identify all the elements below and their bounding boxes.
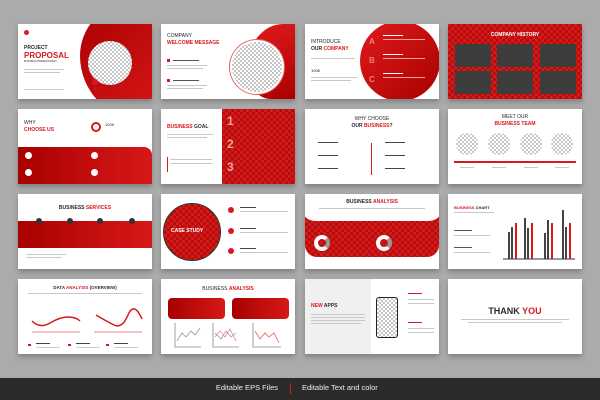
- title: PROPOSAL: [24, 51, 69, 60]
- heading: OUR COMPANY: [311, 46, 349, 52]
- red checker panel: 1: [227, 114, 234, 128]
- slide: business analysis donuts: [305, 194, 439, 269]
- slide: introduce our company: B: [369, 56, 375, 65]
- slide: new apps: [305, 279, 439, 354]
- slide: why choose our business: [305, 109, 439, 184]
- photo placeholder circle: [88, 41, 132, 85]
- slide: why choose us: [18, 109, 152, 184]
- letters: A: [369, 37, 375, 46]
- slide: thank you: THANK YOU: [488, 306, 542, 316]
- red circle: [360, 21, 440, 101]
- heading: [494, 114, 536, 127]
- footer bar: [0, 378, 600, 400]
- slide: company history: [448, 24, 582, 99]
- slide: project proposal: [18, 24, 152, 99]
- heading: BUSINESS CHART: [454, 205, 490, 210]
- red boxes: [168, 298, 225, 319]
- title: BUSINESS PRESENTATION: [24, 60, 56, 63]
- heading: WHY: [24, 120, 36, 126]
- title: BUSINESS ANALYSIS: [346, 199, 398, 205]
- heading: INTRODUCE: [311, 39, 341, 45]
- heading: BUSINESS TEAM: [494, 121, 536, 127]
- heading: BUSINESS GOAL: [167, 124, 208, 130]
- slide: why choose us: 100K: [105, 122, 114, 127]
- heading: COMPANY: [167, 33, 192, 39]
- slide: business chart: [448, 194, 582, 269]
- slide: thank you: [448, 279, 582, 354]
- phone: [376, 297, 398, 338]
- bar chart: [503, 210, 575, 260]
- icons: [228, 207, 234, 213]
- slide: case study: CASE STUDY: [171, 228, 203, 234]
- slide: business goal: [161, 109, 295, 184]
- title: BUSINESS SERVICES: [59, 205, 111, 211]
- title: DATA ANALYSIS (OVERVIEW): [53, 285, 117, 290]
- heading: [24, 120, 54, 133]
- heading: OUR BUSINESS?: [351, 123, 393, 129]
- red shape: [80, 4, 190, 119]
- small charts: [174, 323, 281, 348]
- history boxes: [455, 44, 576, 94]
- red checker panel: [222, 109, 295, 184]
- red band: [18, 221, 152, 248]
- heading: [351, 116, 393, 129]
- slide: introduce our company: [305, 24, 439, 99]
- heading: CHOOSE US: [24, 127, 54, 133]
- logo: [24, 30, 29, 35]
- slide: introduce our company: 100$: [311, 68, 320, 73]
- title: [24, 45, 69, 63]
- slide: new apps: NEW APPS: [311, 303, 338, 309]
- red circle: [163, 203, 221, 261]
- slide: business services: [18, 194, 152, 269]
- heading: WHY CHOOSE: [355, 116, 389, 122]
- donuts: [314, 235, 330, 251]
- icons: [36, 218, 42, 224]
- team photos: [456, 133, 478, 155]
- heading: [311, 39, 349, 52]
- red panel: [305, 208, 439, 257]
- red dots: [92, 79, 98, 85]
- slide: introduce our company: C: [369, 75, 375, 84]
- heading: MEET OUR: [502, 114, 528, 120]
- red checker panel: 2: [227, 137, 234, 151]
- heading: [167, 33, 220, 46]
- slide: business team: [448, 109, 582, 184]
- red panel: [18, 147, 152, 184]
- slide: business analysis boxes: [161, 279, 295, 354]
- slide: welcome message: [161, 24, 295, 99]
- line charts: [28, 308, 143, 348]
- red shape: [247, 24, 307, 99]
- title: PROJECT: [24, 45, 48, 51]
- stat circle: [91, 122, 101, 132]
- heading: WELCOME MESSAGE: [167, 40, 220, 46]
- footer text left: Editable EPS Files: [216, 383, 278, 392]
- slide: data analysis: [18, 279, 152, 354]
- title: COMPANY HISTORY: [491, 32, 539, 38]
- photo circle: [230, 40, 284, 94]
- gray panel: [305, 279, 371, 354]
- slide: case study: [161, 194, 295, 269]
- footer text right: Editable Text and color: [302, 383, 378, 392]
- red checker panel: 3: [227, 160, 234, 174]
- title: BUSINESS ANALYSIS: [202, 286, 254, 292]
